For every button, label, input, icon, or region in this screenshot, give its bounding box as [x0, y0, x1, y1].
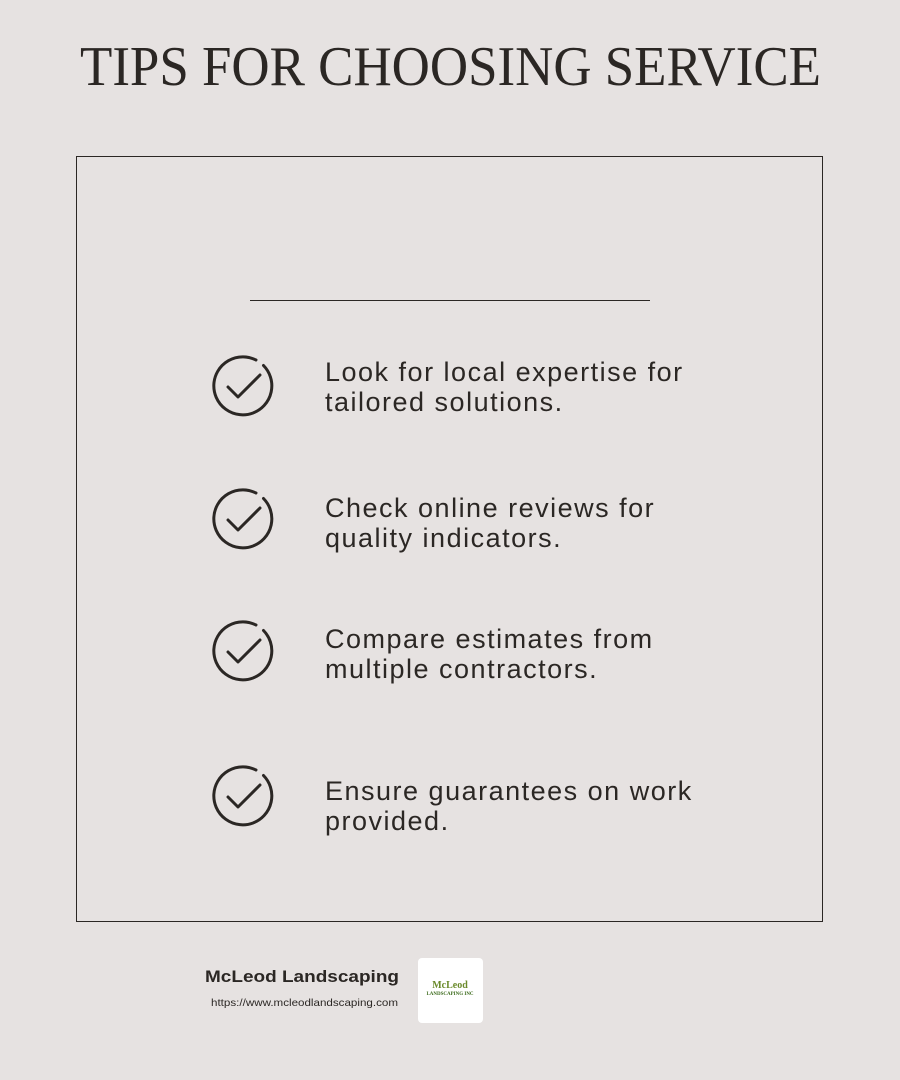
logo	[418, 958, 483, 1023]
tip 2: quality indicators.	[325, 523, 562, 553]
icon: check circle	[214, 357, 272, 415]
footer: brand name: McLeod Landscaping	[205, 967, 399, 986]
panel: tips	[76, 156, 822, 922]
tip 3: multiple contractors.	[325, 654, 598, 684]
tip 4: Ensure guarantees on work	[325, 776, 693, 806]
tip 4	[214, 767, 693, 836]
logo: McLeod	[432, 980, 468, 991]
tip 2: Check online reviews for	[325, 493, 655, 523]
icon: check circle	[214, 622, 272, 680]
icon: check circle	[214, 767, 272, 825]
tip 2	[214, 490, 655, 553]
icon: check circle	[214, 490, 272, 548]
title: TIPS FOR CHOOSING SERVICE	[80, 36, 821, 98]
tip 1: Look for local expertise for	[325, 357, 684, 387]
tip 1: tailored solutions.	[325, 387, 564, 417]
tip 3: Compare estimates from	[325, 624, 654, 654]
tip 1	[214, 357, 684, 417]
tip 3	[214, 622, 654, 684]
logo: LANDSCAPING INC	[426, 992, 474, 997]
footer: url: https://www.mcleodlandscaping.com	[211, 997, 398, 1009]
tip 4: provided.	[325, 806, 450, 836]
